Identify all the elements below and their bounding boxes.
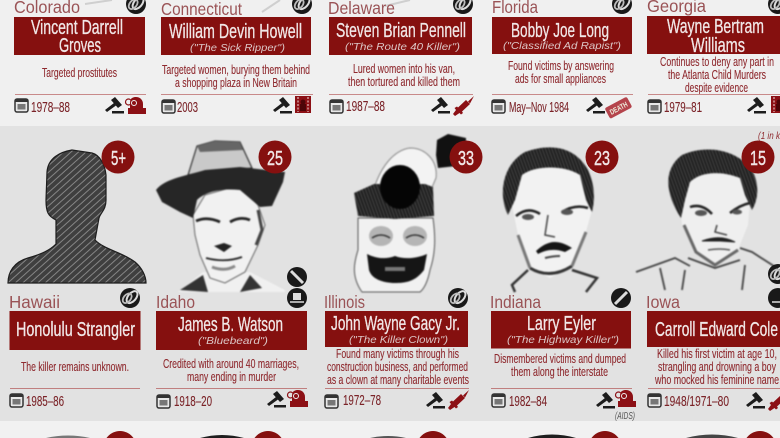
icon: lethal injection — [768, 391, 780, 411]
icon: gavel — [273, 97, 292, 114]
description: Targeted prostitutes — [42, 65, 117, 80]
card: Steven Brian Pennell: then tortured and killed them — [348, 74, 460, 89]
icon: calendar — [15, 99, 28, 112]
name banner — [325, 311, 468, 347]
icon: calendar — [492, 100, 505, 113]
dates: 1982–84 — [509, 394, 547, 410]
icon: siren — [616, 390, 636, 407]
nickname: ("The Highway Killer") — [507, 334, 619, 346]
card: John Wayne Gacy Jr.: as a clown at many charitable events — [327, 372, 469, 387]
name: Bobby Joe Long — [511, 20, 609, 42]
row 2 background — [0, 126, 780, 421]
portrait: James B. Watson — [156, 141, 285, 292]
icon: death stamp: DEATH — [608, 100, 629, 117]
badge: victims 33 — [450, 140, 482, 174]
nickname: ("Classified Ad Rapist") — [503, 40, 621, 52]
icon: method rope — [453, 0, 473, 14]
icon: calendar — [330, 100, 343, 113]
icon: lethal injection — [453, 96, 474, 116]
icon: prison cell — [771, 96, 780, 113]
badge: victims 15 — [742, 140, 774, 174]
card: Vincent Darrell Groves — [14, 0, 146, 116]
portrait: Larry Eyler — [503, 147, 597, 292]
icon: gavel — [586, 97, 605, 114]
icon: method rope — [120, 288, 140, 308]
dates: 1948/1971–80 — [664, 394, 729, 410]
state label: Hawaii — [9, 292, 60, 312]
name banner — [14, 17, 145, 55]
icon: gavel — [426, 392, 445, 408]
card: Honolulu Strangler — [9, 288, 140, 410]
icon: knife — [287, 267, 307, 287]
card: Larry Eyler — [490, 288, 636, 422]
badge: victims 15: 15 — [750, 148, 766, 170]
badge: victims 33: 33 — [458, 148, 474, 170]
icon: outcome siren — [126, 97, 146, 114]
description: The killer remains unknown. — [21, 359, 129, 374]
icon: calendar — [492, 394, 505, 407]
icon: gavel — [267, 391, 286, 408]
row 3 portrait tops — [46, 434, 738, 438]
card: Vincent Darrell Groves: Groves — [59, 35, 101, 57]
icon: calendar — [325, 395, 338, 408]
name: Vincent Darrell — [31, 17, 123, 39]
description: Credited with around 40 marriages, — [163, 356, 299, 371]
name banner — [10, 311, 140, 350]
dates: 1918–20 — [174, 394, 212, 410]
dates: 2003 — [177, 100, 198, 116]
nickname: ("Bluebeard") — [198, 335, 268, 347]
name banner — [329, 17, 472, 55]
icon: drowning — [768, 288, 780, 308]
badge: victims 5+: 5+ — [111, 148, 126, 170]
name banner — [156, 311, 307, 350]
name: William Devin Howell — [169, 21, 302, 43]
icon: method rope — [292, 0, 312, 14]
icon: calendar — [648, 100, 661, 113]
card: Bobby Joe Long: ads for small appliances — [515, 71, 606, 86]
name: James B. Watson — [178, 314, 283, 336]
description: Found many victims through his — [336, 346, 459, 361]
description: Targeted women, burying them behind — [162, 62, 310, 77]
portrait: John Wayne Gacy clown — [354, 134, 466, 292]
icon: prison cell — [295, 96, 311, 113]
note: AIDS: (AIDS) — [615, 411, 635, 422]
icon: gavel — [431, 97, 450, 114]
badge: victims 25: 25 — [267, 148, 283, 170]
card: James B. Watson: many ending in murder — [187, 369, 276, 384]
dates: 1972–78 — [343, 393, 381, 409]
sketch remnants at top of row 1 — [85, 0, 410, 12]
icon: gavel — [105, 97, 124, 114]
icon: drowning — [287, 288, 307, 308]
icon: calendar — [162, 100, 175, 113]
icon: siren — [288, 390, 308, 407]
icon: method rope — [612, 0, 632, 14]
nickname: ("The Killer Clown") — [349, 334, 448, 346]
badge: victims 23 — [586, 140, 618, 174]
card: John Wayne Gacy Jr.: construction business, and performed — [327, 359, 468, 374]
description: Lured women into his van, — [353, 61, 455, 76]
portrait: unknown silhouette — [8, 150, 146, 283]
icon: method rope — [768, 0, 780, 14]
card: William Devin Howell: a shopping plaza in New Britain — [175, 75, 297, 90]
name banner — [647, 16, 780, 54]
nickname: ("The Route 40 Killer") — [345, 41, 460, 53]
nickname: ("The Sick Ripper") — [190, 42, 285, 54]
badge: victims 25 — [258, 140, 292, 174]
icon: lethal injection — [448, 390, 469, 410]
row 1 background — [0, 0, 780, 125]
card: James B. Watson — [156, 267, 308, 410]
icon: method rope — [126, 0, 146, 14]
dates: 1979–81 — [664, 100, 702, 116]
row 3 background — [0, 421, 780, 438]
icon: gavel — [747, 97, 766, 114]
description: Found victims by answering — [508, 58, 614, 73]
name: John Wayne Gacy Jr. — [331, 313, 460, 335]
portrait: Carroll Edward Cole — [636, 150, 780, 290]
dates: 1978–88 — [31, 100, 70, 116]
card: Steven Brian Pennell — [328, 0, 474, 116]
name: Honolulu Strangler — [16, 319, 135, 341]
state label: Idaho — [156, 292, 195, 312]
state label: Indiana — [490, 292, 541, 312]
card: Bobby Joe Long — [492, 0, 633, 119]
row 3 victim badges — [106, 431, 774, 438]
name banner — [161, 17, 311, 55]
state label: Illinois — [324, 292, 365, 312]
icon: knife — [611, 288, 631, 308]
card: William Devin Howell — [161, 0, 313, 116]
icon: calendar — [157, 395, 170, 408]
dates: May–Nov 1984 — [509, 100, 569, 116]
icon: method rope — [448, 288, 468, 308]
icon: calendar — [648, 394, 661, 407]
card: John Wayne Gacy Jr. — [324, 288, 469, 410]
card: Wayne Bertram Williams: Williams — [691, 35, 745, 57]
description: Dismembered victims and dumped — [494, 351, 626, 366]
name banner — [647, 311, 780, 347]
card: Larry Eyler: them along the interstate — [511, 364, 608, 379]
card: Wayne Bertram Williams — [647, 0, 780, 116]
icon: gavel — [746, 392, 765, 408]
icon: method rope — [768, 264, 780, 284]
card: Carroll Edward Cole — [646, 264, 780, 411]
name: Steven Brian Pennell — [336, 20, 466, 42]
dates: 1985–86 — [26, 394, 64, 410]
name banner — [492, 17, 632, 54]
icon: gavel — [596, 392, 615, 408]
dates: 1987–88 — [346, 99, 385, 115]
badge: victims 5+ — [102, 140, 134, 174]
state label: Iowa — [646, 292, 680, 312]
card: Wayne Bertram Williams: despite evidence — [685, 80, 748, 95]
badge: victims 23: 23 — [594, 148, 610, 170]
icon: calendar — [10, 394, 23, 407]
name: Larry Eyler — [527, 313, 596, 335]
name banner — [491, 311, 631, 348]
